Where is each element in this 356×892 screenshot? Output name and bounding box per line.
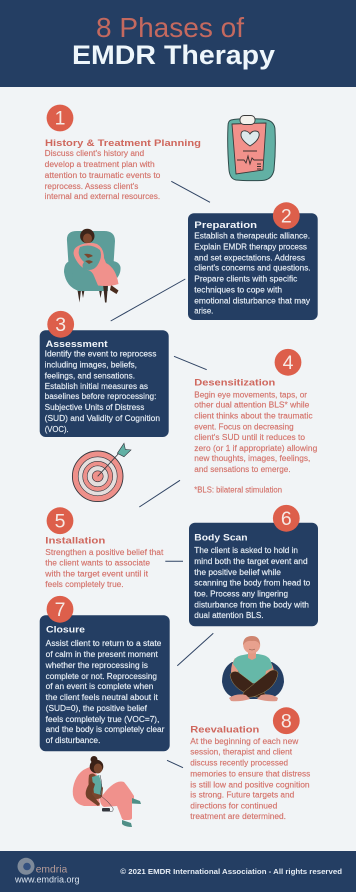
icon: man sitting cross-legged on beanbag (222, 636, 284, 701)
body text (194, 546, 311, 620)
body text: memories to ensure that distress (190, 769, 310, 778)
body text: client's concerns and questions. (194, 263, 311, 272)
body text: develop a treatment plan with (45, 160, 155, 169)
body text: new thoughts, images, feelings, (194, 454, 310, 463)
body text (44, 548, 164, 589)
connector 5 to 6 (165, 560, 183, 562)
icon: woman with tapping device on beanbag (73, 756, 141, 827)
body text: Prepare clients with specific (194, 274, 297, 283)
body text: the positive belief while (194, 568, 282, 577)
body text: directions for continued (190, 801, 277, 810)
body text (45, 639, 165, 745)
connector 6 to 7 (177, 633, 213, 666)
body text: Begin eye movements, taps, or (194, 390, 307, 399)
body text: with the target event until it (44, 569, 149, 578)
body text: At the beginning of each new (190, 737, 299, 746)
panel: assessment (40, 330, 169, 437)
number badge 6: 6 (281, 508, 292, 530)
body text (45, 349, 160, 434)
body text: Identify the event to reprocess (45, 349, 156, 358)
body text: (SUD=0), the positive belief (46, 704, 148, 713)
body text: of calm in the present moment (46, 650, 159, 659)
body text: The client is asked to hold in (194, 546, 298, 555)
body text: and the body is completely clear (46, 725, 165, 734)
heading: Closure (46, 624, 85, 635)
body text: Establish initial measures as (45, 382, 148, 391)
body text: of an event is complete when (46, 682, 153, 691)
heading: Preparation (194, 219, 257, 230)
body text (45, 149, 161, 201)
body text: complete or not. Reprocessing (46, 672, 157, 681)
panel: body scan (189, 523, 318, 626)
phase 8: reevaluation (190, 707, 310, 821)
number badge 7: 7 (55, 599, 65, 621)
copyright: © 2021 EMDR International Association - All rights reserved (120, 867, 342, 876)
heading: Installation (45, 535, 106, 546)
body text (194, 390, 317, 474)
body text: other dual attention BLS* while (194, 400, 310, 409)
heading: Desensitization (194, 377, 276, 388)
body text: session, therapist and client (190, 747, 293, 756)
heading: History & Treatment Planning (45, 137, 201, 148)
connector 4 to 5 (139, 480, 180, 507)
number badge 4 (275, 349, 301, 376)
body text: Strengthen a positive belief that (45, 548, 164, 557)
body text: scanning the body from head to (194, 578, 311, 587)
phase 4: desensitization (194, 349, 317, 494)
connector 1 to 2 (171, 181, 210, 202)
phase 7: closure (40, 596, 170, 751)
body text: feels completely true (VOC=7), (46, 715, 159, 724)
number badge 2: 2 (281, 206, 292, 228)
body text: attention to traumatic events to (45, 171, 161, 180)
body text: Subjective Units of Distress (45, 403, 144, 412)
body text (190, 737, 310, 821)
number badge 1 (47, 105, 73, 131)
emdria logo (18, 858, 67, 875)
body text (194, 231, 311, 315)
body text: the client feels neutral about it (46, 693, 159, 702)
icon: clipboard with heart (228, 116, 275, 181)
body text: of disturbance. (46, 736, 100, 745)
body text: Establish a therapeutic alliance. (194, 231, 310, 240)
number badge 3: 3 (55, 314, 66, 336)
body text: baselines before reprocessing: (45, 392, 156, 401)
footer bar (0, 851, 356, 892)
body text: Discuss client's history and (45, 149, 144, 158)
panel: closure (40, 615, 170, 751)
body text: toe. Process any lingering (194, 589, 288, 598)
body text: Explain EMDR therapy process (194, 242, 307, 251)
body text: event. Focus on decreasing (194, 422, 294, 431)
phase 2: preparation (188, 202, 318, 320)
body text: arise. (194, 306, 213, 315)
heading: Assessment (46, 338, 108, 349)
body text: emotional disturbance that may (194, 296, 310, 305)
number badge 8: 8 (281, 710, 292, 732)
phase 3: assessment (40, 311, 169, 437)
number badge 5: 5 (55, 510, 66, 532)
body text: is strong. Future targets and (190, 790, 294, 799)
phase 6: body scan (189, 505, 318, 626)
body text: feels completely true. (45, 580, 124, 589)
body text: dual attention BLS. (194, 611, 264, 620)
emdria logo: emdria (36, 863, 67, 875)
body text: including images, beliefs, (45, 360, 137, 369)
heading: Body Scan (194, 532, 248, 543)
body text: client thinks about the traumatic (194, 411, 313, 420)
header banner (0, 0, 356, 87)
phase 5: installation (44, 507, 164, 589)
icon: woman hugging pillow in armchair (64, 229, 121, 302)
connector 7 to 8 (167, 760, 183, 768)
body text: client's SUD until it reduces to (194, 433, 306, 442)
icon: target with arrow (72, 443, 131, 502)
title line 1: 8 Phases of (96, 12, 244, 43)
number badge 4: 4 (283, 352, 294, 374)
number badge 1: 1 (55, 108, 65, 130)
footnote: *BLS: bilateral stimulation (194, 485, 282, 494)
title line 2: EMDR Therapy (72, 40, 275, 70)
body text: discuss recently processed (190, 758, 288, 767)
number badge 7 (47, 596, 73, 623)
connector 3 to 4 (174, 356, 207, 370)
body text: (SUD) and Validity of Cognition (45, 414, 160, 423)
body text: whether the reprocessing is (45, 661, 148, 670)
body text: mind both the target event and (194, 557, 308, 566)
website: www.emdria.org (14, 875, 79, 885)
body text: internal and external resources. (45, 192, 160, 201)
body text: Assist client to return to a state (46, 639, 162, 648)
connector 2 to 3 (111, 279, 185, 321)
phase 1: history and treatment planning (45, 105, 201, 201)
body text: and sensations to emerge. (194, 465, 291, 474)
body text: treatment are determined. (190, 812, 286, 821)
body text: techniques to cope with (194, 285, 282, 294)
body text: zero (or 1 if appropriate) allowing (194, 444, 317, 453)
panel: preparation (188, 213, 318, 320)
body text: feelings, and sensations. (45, 371, 135, 380)
body text: reprocess. Assess client's (45, 182, 138, 191)
body text: disturbance from the body with (194, 600, 309, 609)
body text: the client wants to associate (45, 558, 151, 567)
body text: (VOC). (45, 425, 69, 434)
heading: Reevaluation (190, 724, 260, 735)
body text: and set expectations. Address (194, 253, 305, 262)
body text: is still low and positive cognition (190, 780, 310, 789)
